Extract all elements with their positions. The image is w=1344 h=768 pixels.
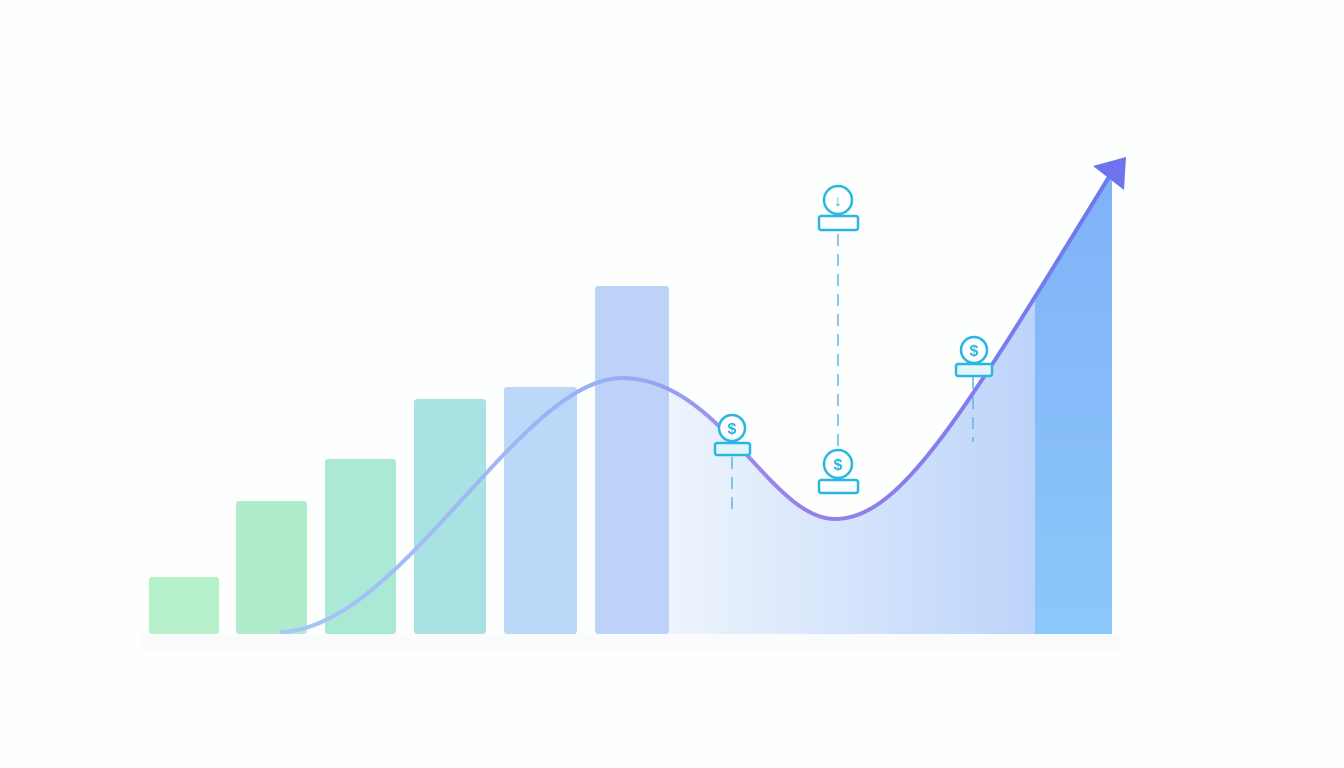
coin symbols: $ (834, 457, 843, 474)
baseline shadow (140, 634, 1120, 652)
bars (149, 286, 669, 634)
area under curve (669, 150, 1112, 634)
coin symbols: $ (728, 421, 737, 438)
coin symbols: ↓ (834, 193, 842, 210)
icon: coin markers (715, 186, 992, 493)
growth chart (149, 157, 1126, 634)
coin symbols: $ (970, 343, 979, 360)
coin symbols (728, 193, 979, 474)
trend curve with arrow (280, 157, 1126, 632)
dashed markers (732, 234, 973, 516)
